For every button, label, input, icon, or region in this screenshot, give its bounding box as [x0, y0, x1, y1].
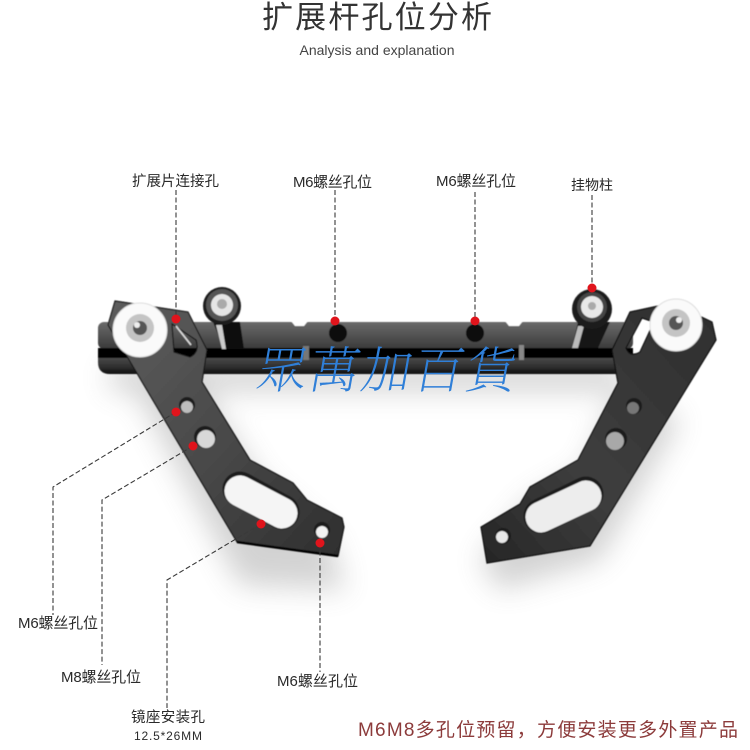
label: extension plate hole: 扩展片连接孔 — [132, 173, 220, 190]
left slot highlight — [176, 326, 191, 345]
left hanging post — [203, 287, 244, 349]
red marker dots — [172, 284, 596, 548]
left M8 hole — [194, 426, 216, 448]
bar black channel — [98, 348, 633, 359]
callout leader lines — [53, 190, 592, 708]
right M6 hole — [626, 398, 642, 414]
label: mirror mount hole: 镜座安装孔 — [131, 708, 206, 726]
extension bar — [98, 321, 633, 374]
left bracket — [108, 301, 344, 556]
label: mirror mount size: 12.5*26MM — [134, 729, 202, 743]
title: 扩展杆孔位分析 — [262, 0, 492, 35]
label: hanging post: 挂物柱 — [571, 177, 613, 193]
bar notches — [291, 321, 523, 326]
soft product shadow — [110, 365, 680, 590]
label: top M6 right: M6螺丝孔位 — [436, 173, 516, 190]
watermark: 眾萬加百貨 — [253, 343, 523, 399]
label: left M6: M6螺丝孔位 — [18, 615, 98, 632]
bar upper face — [98, 322, 633, 349]
product photo — [98, 287, 716, 563]
label: bottom M6: M6螺丝孔位 — [277, 673, 358, 690]
bar lower face — [98, 358, 633, 374]
subtitle: Analysis and explanation — [300, 42, 454, 58]
left M6 hole — [179, 397, 195, 413]
right washer and bolt — [650, 299, 702, 351]
label: top M6 left: M6螺丝孔位 — [293, 174, 372, 191]
right small hole — [495, 528, 511, 544]
bar hole left — [329, 324, 347, 342]
red note: M6M8多孔位预留，方便安装更多外置产品 — [358, 719, 738, 741]
right slot — [541, 494, 586, 517]
right bracket — [481, 299, 716, 563]
left small hole — [314, 522, 330, 538]
right hanging post — [572, 289, 612, 348]
label: left M8: M8螺丝孔位 — [61, 669, 141, 686]
right M8 hole — [605, 428, 627, 450]
left bottom edge — [237, 542, 338, 556]
right plate — [481, 303, 716, 563]
bar hole right — [466, 324, 484, 342]
left plate — [108, 301, 344, 556]
left slot — [240, 489, 282, 513]
left washer and bolt — [113, 303, 167, 357]
